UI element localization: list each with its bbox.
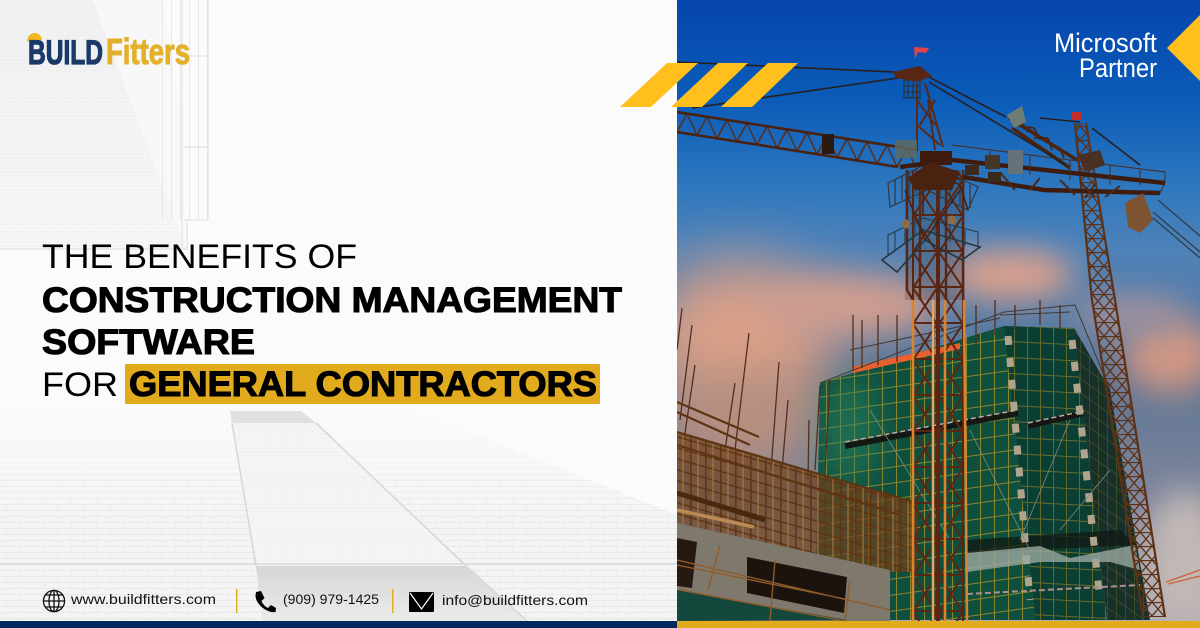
title [42,238,622,404]
title line one: THE BENEFITS OF [42,238,357,276]
counterweight [1125,193,1153,233]
concrete quoins [1008,336,1100,600]
diagonal bracing [870,410,1110,550]
building under construction [815,305,1150,620]
second jib [1009,118,1077,168]
red flag two [1072,112,1081,120]
upper mast legs [917,83,943,150]
roof scaffold [820,305,1110,390]
green glow on facade [820,375,880,485]
vertical facade lines [0,0,208,249]
microsoft partner label: Microsoft [1054,28,1157,58]
logo: BuildFitters [27,31,190,72]
crane cables [677,62,1140,165]
icon: hard hat [27,33,42,42]
panel: construction photo [645,0,1200,628]
panel: left grey building background [0,0,677,628]
concrete structure [677,523,890,622]
second crane cab [1078,150,1105,172]
website: www.buildfitters.com [70,591,216,607]
brick wall upper left [0,0,186,248]
crane tail [1153,200,1200,258]
rebar and rooftop poles [677,300,1060,480]
plastic sheeting [967,545,1140,572]
distant crane [1166,570,1200,584]
facade seams [0,423,677,621]
lower floor band [967,585,1140,594]
jib cab [822,134,834,154]
icon: phone [256,591,276,612]
microsoft partner label [1054,28,1157,83]
orange banner [852,343,960,373]
red flag one [914,47,929,59]
dark openings [747,557,847,613]
lamps [902,220,910,228]
lower platform [882,218,980,272]
yellow diagonal stripes [620,63,798,107]
logo: BuildFitters: Fitters [106,31,190,72]
dark floor gap above plastic [967,530,1137,553]
central facade panel [232,423,466,565]
phone number: (909) 979-1425 [283,591,379,607]
divider [236,589,237,613]
lower brick facade [0,405,677,621]
upper platform [888,163,978,210]
gold footer bar [677,621,1200,628]
contact row [43,589,588,613]
counter jib beams [895,140,1165,198]
floor bands [845,413,1084,446]
yellow diamond [1167,15,1200,81]
navy footer bar [0,621,677,628]
title line two: CONSTRUCTION MANAGEMENT [42,281,622,320]
email: info@buildfitters.com [442,592,588,608]
logo: BuildFitters: BUILD [28,34,103,72]
title line three: SOFTWARE [42,323,255,362]
heavy scaffold beams [677,493,765,520]
icon: mail [409,592,434,612]
sunset clouds [645,249,1200,628]
highlighted phrase: GENERAL CONTRACTORS [129,365,597,404]
green netting [677,590,847,621]
grey strip at panel top [230,411,316,423]
white building corner sliver [93,0,185,248]
brown scaffold [677,402,917,572]
microsoft partner label: Partner [1079,53,1157,83]
main jib truss [677,112,918,170]
top cage [904,80,920,98]
main crane tower [882,80,980,621]
crane top head [893,66,932,82]
second crane tower [1007,106,1165,617]
icon: globe [43,590,65,612]
title line four: FOR [42,366,118,404]
divider [392,589,393,613]
grey band at panel bottom [256,566,527,621]
